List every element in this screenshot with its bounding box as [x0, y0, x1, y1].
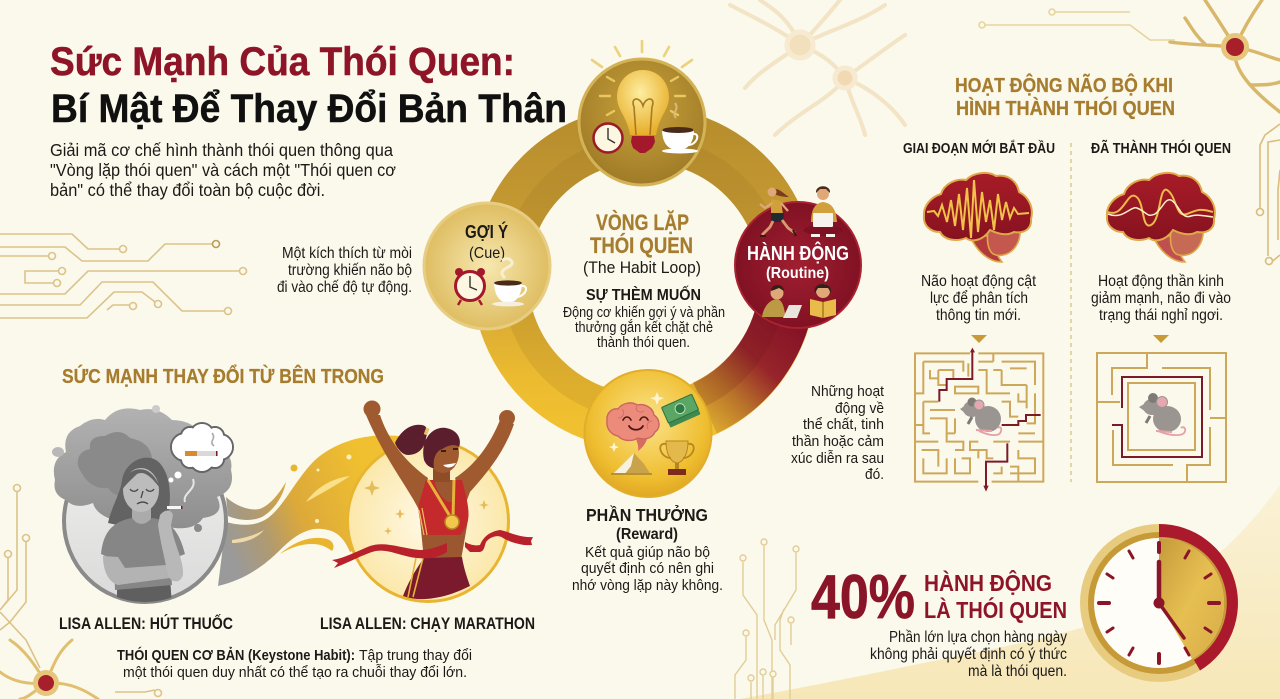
tick marks	[1099, 543, 1219, 663]
text: early stage: lực để phân tích	[930, 290, 1028, 307]
statistic heading: LÀ THÓI QUEN	[924, 596, 1067, 623]
ring centre text: SỰ THÈM MUỐN	[586, 284, 701, 304]
routine circle: (Routine)	[766, 265, 829, 282]
decoration: neuron top right	[1170, 0, 1280, 112]
ring centre text: Động cơ khiến gợi ý và phần	[563, 305, 725, 321]
title	[50, 40, 567, 131]
icon: person reading	[810, 284, 836, 318]
text: early stage	[921, 273, 1037, 324]
icon: mouse right	[1139, 393, 1185, 435]
statistic description: mà là thói quen.	[968, 663, 1067, 680]
caption: smoking: LISA ALLEN: HÚT THUỐC	[59, 613, 233, 633]
decoration: circuit top right and right edge	[979, 9, 1280, 265]
icon: happy brain	[607, 403, 659, 451]
smoke cloud	[52, 405, 232, 532]
maze route	[1112, 377, 1202, 457]
icon: person with laptop	[803, 186, 843, 237]
icon: coffee cup	[662, 103, 698, 154]
intro text	[50, 140, 396, 200]
cue description: Một kích thích từ mòi	[282, 245, 412, 262]
panel: marathon runner	[332, 400, 533, 602]
cue description: đi vào chế độ tự động.	[277, 279, 412, 296]
right heading: HOẠT ĐỘNG NÃO BỘ KHI	[955, 73, 1173, 97]
reward text: Kết quả giúp não bộ	[585, 544, 710, 561]
ring centre text: (The Habit Loop)	[583, 258, 701, 277]
text: early stage: Não hoạt động cật	[921, 273, 1037, 290]
routine description: đó.	[865, 466, 884, 483]
icon: person at laptop	[762, 285, 802, 318]
icon: trophy	[660, 441, 694, 475]
text: habit stage: trạng thái nghỉ ngơi.	[1099, 307, 1223, 324]
column headings: GIAI ĐOẠN MỚI BẮT ĐẦU	[903, 139, 1055, 157]
clock 40 percent	[1080, 524, 1238, 682]
decoration: faint neurons top centre	[730, 0, 905, 135]
cue description	[277, 245, 412, 296]
gold wedge	[1159, 538, 1224, 659]
reward text	[572, 504, 723, 594]
routine description: xúc diễn ra sau	[791, 450, 884, 467]
icon: sparkles	[609, 392, 664, 452]
statistic: 40 percent: 40%	[811, 563, 915, 632]
sparkles	[364, 480, 489, 535]
ring centre text	[563, 210, 725, 351]
reward text: nhớ vòng lặp này không.	[572, 577, 723, 594]
maze: complex	[915, 348, 1043, 492]
ring centre text: thành thói quen.	[597, 335, 690, 351]
runner figure	[364, 400, 515, 599]
cue circle	[424, 203, 550, 329]
intro text: "Vòng lặp thói quen" và cách một "Thói quen cơ	[50, 160, 396, 180]
text: habit stage: Hoạt động thần kinh	[1098, 273, 1224, 290]
panel: smoking woman	[52, 405, 233, 605]
decoration: circuit left	[0, 234, 246, 318]
arrow: down to right maze	[1153, 335, 1169, 343]
finish ribbon	[332, 530, 533, 568]
icon: calm brain	[1107, 173, 1215, 262]
routine circle	[735, 186, 861, 328]
routine description: Những hoạt	[811, 383, 885, 400]
title: Sức Mạnh Của Thói Quen:	[50, 40, 515, 84]
reward text: PHẦN THƯỞNG	[586, 504, 708, 525]
column headings	[903, 139, 1231, 157]
text: early stage: thông tin mới.	[936, 307, 1021, 324]
cigarette	[167, 506, 182, 509]
routine description: thể chất, tinh	[803, 416, 884, 433]
icon: mouse left	[960, 398, 1001, 435]
right heading	[955, 73, 1175, 120]
keystone habit text: Tập trung thay đổi	[359, 647, 472, 664]
icon: clock	[594, 124, 622, 152]
icon: alarm clock	[455, 268, 485, 305]
arrow: down to left maze	[971, 335, 987, 343]
cue circle: GỢI Ý	[465, 221, 508, 242]
icon: bulb	[600, 70, 685, 153]
cue circle: (Cue)	[469, 245, 505, 262]
top circle: lightbulb	[579, 41, 705, 185]
icon: coffee cup	[492, 259, 526, 306]
icon: active brain	[924, 173, 1032, 262]
maze route	[939, 352, 1041, 487]
icon: runner	[760, 188, 796, 236]
reward text: (Reward)	[616, 526, 678, 543]
habit loop ring	[500, 134, 788, 422]
cue description: trường khiến não bộ	[288, 262, 412, 279]
keystone habit text: một thói quen duy nhất có thể tạo ra chuỗi thay đổi lớn.	[123, 664, 467, 681]
text: habit stage	[1091, 273, 1231, 324]
caption: marathon: LISA ALLEN: CHẠY MARATHON	[320, 615, 535, 633]
ring centre text: VÒNG LẶP	[596, 210, 689, 235]
statistic description: Phần lớn lựa chọn hàng ngày	[889, 629, 1067, 646]
transformation flow	[218, 435, 420, 586]
reward circle	[584, 370, 712, 497]
column headings: ĐÃ THÀNH THÓI QUEN	[1091, 139, 1231, 157]
ring centre text: THÓI QUEN	[590, 233, 693, 258]
clock hands	[1157, 562, 1161, 603]
thought bubble with cigarette	[168, 423, 233, 482]
maze: simple	[1097, 353, 1226, 482]
section heading: inner change: SỨC MẠNH THAY ĐỔI TỪ BÊN TRONG	[62, 364, 384, 388]
statistic heading: HÀNH ĐỘNG	[924, 569, 1052, 596]
ring centre text: thưởng gắn kết chặt chẻ	[575, 319, 713, 336]
icon: mountain	[611, 453, 652, 475]
icon: rays	[592, 41, 692, 67]
text: habit stage: giảm mạnh, não đi vào	[1091, 290, 1231, 307]
routine description	[791, 383, 885, 483]
statistic description: không phải quyết định có ý thức	[870, 646, 1067, 663]
title: Bí Mật Để Thay Đổi Bản Thân	[51, 87, 567, 131]
icon: banknotes	[662, 394, 701, 428]
decoration: circuit bottom centre	[735, 539, 799, 699]
right heading: HÌNH THÀNH THÓI QUEN	[956, 96, 1175, 120]
statistic heading	[924, 569, 1067, 623]
routine description: động về	[835, 400, 884, 417]
intro text: bản" có thể thay đổi toàn bộ cuộc đời.	[50, 180, 325, 200]
routine description: thần hoặc cảm	[792, 433, 884, 450]
red arc	[1159, 524, 1238, 670]
statistic description	[870, 629, 1067, 680]
keystone habit text	[117, 646, 472, 681]
decoration: circuit and neuron bottom left	[0, 484, 162, 699]
background wave	[740, 485, 1280, 699]
reward text: quyết định có nên ghi	[581, 560, 714, 577]
routine circle: HÀNH ĐỘNG	[747, 241, 849, 265]
intro text: Giải mã cơ chế hình thành thói quen thông qua	[50, 140, 393, 160]
keystone habit text: THÓI QUEN CƠ BẢN (Keystone Habit):	[117, 646, 355, 664]
woman figure	[101, 458, 185, 605]
